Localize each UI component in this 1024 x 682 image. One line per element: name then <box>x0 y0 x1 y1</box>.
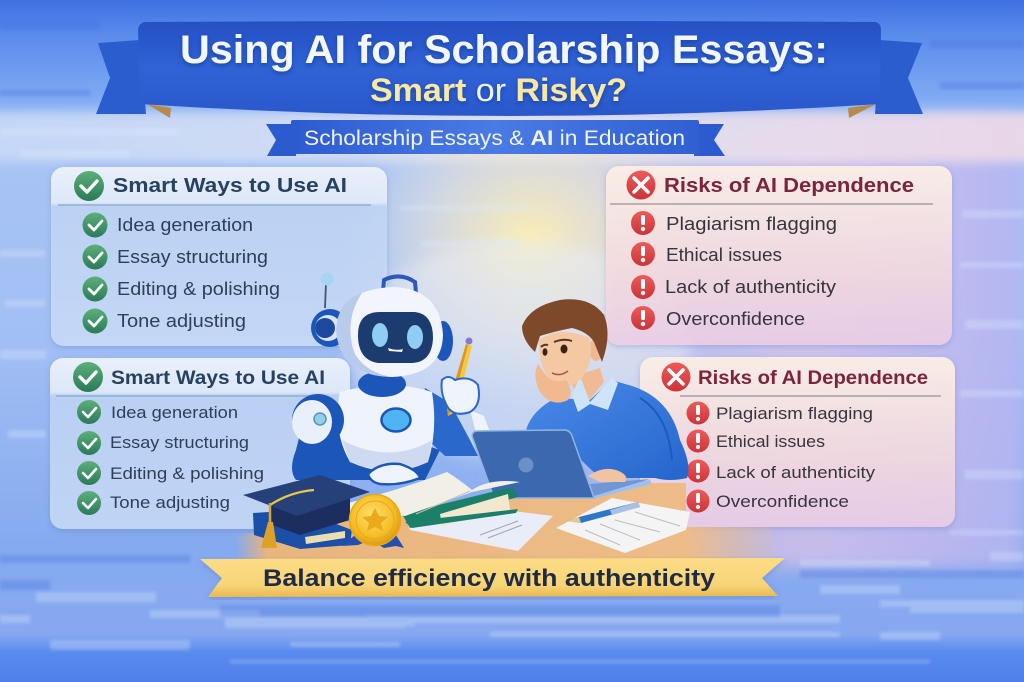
list item: overconfidence: Overconfidence <box>716 492 849 511</box>
robot ear right <box>433 321 453 361</box>
list item: overconfidence <box>686 490 849 512</box>
panel: smart ways top <box>51 167 387 346</box>
robot antenna <box>320 272 334 308</box>
subtitle banner <box>266 120 725 156</box>
list item: tone adjusting <box>77 491 230 515</box>
robot eyes <box>372 323 423 349</box>
robot raised hand <box>442 377 479 414</box>
green book <box>402 487 518 528</box>
laptop screen <box>472 430 594 498</box>
left ribbon tail <box>96 40 146 114</box>
ribbon body <box>138 21 881 116</box>
list item: tone adjusting: Tone adjusting <box>110 493 230 512</box>
essay papers <box>405 510 553 551</box>
desk <box>235 483 785 560</box>
list item: idea generation: Idea generation <box>111 403 238 422</box>
list item: editing and polishing: Editing & polishing <box>117 278 280 299</box>
graduation cap <box>243 475 370 535</box>
list item: essay structuring: Essay structuring <box>110 433 249 452</box>
panel: smart ways bottom <box>50 358 350 529</box>
robot right arm <box>418 388 478 456</box>
medal ribbon <box>342 532 404 548</box>
subtitle banner: Scholarship Essays & AI in Education <box>304 127 685 150</box>
list item: ethical issues: Ethical issues <box>716 432 825 451</box>
bottom banner: Balance efficiency with authenticity <box>263 565 716 592</box>
student ear <box>589 339 603 361</box>
robot visor <box>358 312 433 363</box>
list item: essay structuring: Essay structuring <box>117 246 268 267</box>
student hand on cheek <box>535 364 571 403</box>
list item: idea generation: Idea generation <box>117 214 253 235</box>
list item: ethical issues <box>686 430 825 452</box>
heading: risks: Risks of AI Dependence <box>698 367 928 389</box>
student neck <box>568 368 604 404</box>
medal <box>350 494 400 546</box>
list item: essay structuring <box>77 431 249 455</box>
header icon: check <box>74 171 104 201</box>
list item: lack of authenticity <box>686 460 876 482</box>
title line two: Smart or Risky? <box>370 72 627 108</box>
panel: risks top <box>606 166 952 345</box>
bottom banner <box>200 558 785 597</box>
ribbon fold left <box>147 104 171 118</box>
illustration: laptop <box>472 430 652 498</box>
student sweater <box>526 380 688 480</box>
list item: overconfidence: Overconfidence <box>666 309 805 329</box>
robot forearm highlight <box>470 410 490 440</box>
robot shoulder <box>292 394 344 446</box>
pen <box>567 502 640 523</box>
right ribbon tail <box>875 40 923 114</box>
title line one: Using AI for Scholarship Essays: <box>180 28 828 72</box>
student sleeve shadow <box>640 398 672 460</box>
robot head <box>336 287 443 377</box>
list item: ethical issues <box>631 242 782 266</box>
cap tassel <box>261 503 277 548</box>
robot handle <box>383 276 416 294</box>
ribbon fold right <box>848 104 876 118</box>
blue book under cap <box>253 510 352 549</box>
list item: tone adjusting <box>82 308 246 334</box>
robot lower body <box>292 420 440 480</box>
list item: plagiarism flagging <box>686 402 873 424</box>
list item: editing and polishing <box>77 461 264 485</box>
pencil <box>447 338 472 416</box>
right essay sheet <box>556 498 690 553</box>
header icon: cross <box>662 362 690 392</box>
list item: idea generation <box>77 400 238 424</box>
panel: risks bottom <box>640 357 955 527</box>
laptop logo <box>518 458 534 472</box>
student eyebrows <box>541 340 572 347</box>
list item: idea generation <box>82 212 253 238</box>
laptop base <box>497 480 652 498</box>
list item: lack of authenticity <box>631 275 836 299</box>
list item: tone adjusting: Tone adjusting <box>117 310 246 331</box>
heading: smart ways: Smart Ways to Use AI <box>113 175 347 197</box>
title ribbon <box>96 21 923 118</box>
open book <box>340 472 520 516</box>
student collar <box>572 376 618 412</box>
student mouth <box>552 371 568 375</box>
list item: editing and polishing <box>82 276 280 302</box>
list item: plagiarism flagging: Plagiarism flagging <box>716 404 873 423</box>
robot torso <box>338 385 434 471</box>
robot resting hand <box>368 464 420 484</box>
list item: plagiarism flagging <box>631 211 837 235</box>
list item: essay structuring <box>82 244 268 270</box>
student hair <box>522 299 608 362</box>
header icon: cross <box>626 170 656 200</box>
student typing hand <box>588 469 626 482</box>
heading: smart ways: Smart Ways to Use AI <box>111 367 325 389</box>
header icon: check <box>73 362 103 392</box>
illustration: books and medal <box>243 472 690 553</box>
robot mouth <box>388 348 403 352</box>
student face <box>539 332 591 386</box>
robot neck <box>358 371 406 397</box>
list item: ethical issues: Ethical issues <box>666 245 782 265</box>
list item: lack of authenticity: Lack of authenticity <box>716 463 876 482</box>
robot chest light <box>382 408 410 432</box>
illustration: robot <box>292 272 490 484</box>
list item: lack of authenticity: Lack of authenticity <box>665 277 836 297</box>
student eyes <box>542 344 568 356</box>
heading: risks: Risks of AI Dependence <box>664 175 914 197</box>
illustration: student <box>522 299 688 480</box>
laptop keyboard <box>590 479 650 496</box>
list item: plagiarism flagging: Plagiarism flagging <box>666 214 837 234</box>
robot ear left <box>311 309 349 347</box>
list item: editing and polishing: Editing & polishing <box>110 464 264 483</box>
list item: overconfidence <box>631 306 805 330</box>
